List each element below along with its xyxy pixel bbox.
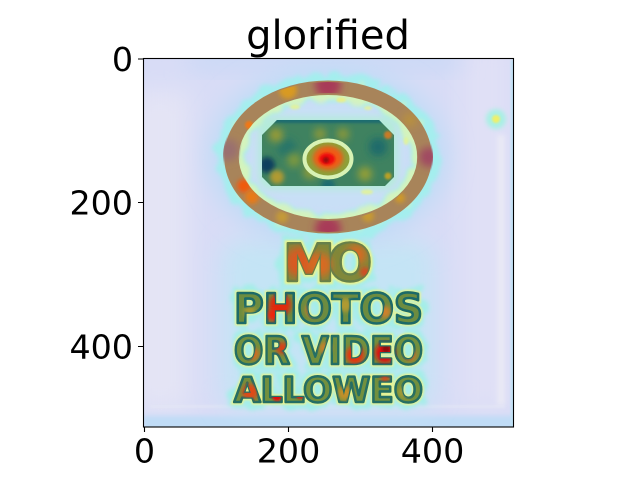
figure: glorified saliency heatmap chart [71, 18, 514, 463]
sign text: NO PHOTOS OR VIDEO ALLOWED: MO [283, 234, 372, 294]
heatmap image [130, 40, 514, 430]
title: glorified [246, 13, 410, 59]
sign text: NO PHOTOS OR VIDEO ALLOWED: PHOTOS [234, 285, 423, 333]
y axis ticks and labels: 0 [112, 40, 133, 79]
oval ring [223, 80, 433, 234]
inner oval pale centre [250, 103, 406, 211]
glow around sign elements: PHOTOS [234, 285, 423, 333]
axes frame [144, 58, 514, 427]
camera body [262, 120, 394, 186]
background wash [130, 40, 514, 430]
corner spot [486, 109, 506, 129]
glow around sign elements: OR VIDEO [234, 329, 423, 373]
camera lens [304, 140, 352, 178]
x axis ticks and labels [134, 427, 464, 470]
glow around sign elements: ALLOWEO [234, 371, 423, 411]
camera glow [259, 117, 397, 189]
x axis ticks and labels: 0 [134, 432, 155, 470]
y axis ticks and labels: 400 [69, 328, 133, 366]
x axis ticks and labels: 400 [401, 432, 464, 470]
glow around sign elements: PHOTOS [234, 285, 423, 333]
sign text: NO PHOTOS OR VIDEO ALLOWED: OR VIDEO [234, 329, 423, 373]
glow around sign elements: MO [283, 234, 372, 294]
y axis ticks and labels [69, 40, 143, 366]
sign text: NO PHOTOS OR VIDEO ALLOWED [234, 234, 423, 411]
glow around sign elements [222, 85, 434, 411]
y axis ticks and labels: 200 [69, 184, 133, 222]
sign text: NO PHOTOS OR VIDEO ALLOWED: ALLOWEO [234, 371, 423, 411]
glow around sign elements: MO [283, 234, 372, 294]
x axis ticks and labels: 200 [257, 432, 320, 470]
glow around sign elements: OR VIDEO [234, 329, 423, 373]
yellow flecks around oval [290, 98, 408, 194]
glow around sign elements: ALLOWEO [234, 371, 423, 411]
